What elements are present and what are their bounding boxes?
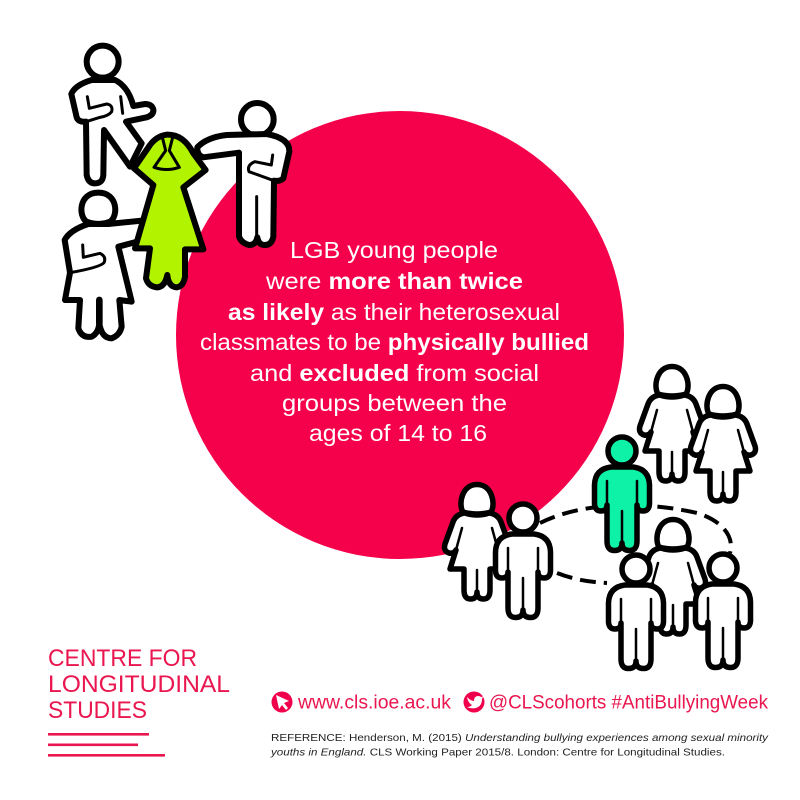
figure: woman top (640, 366, 704, 481)
figure: pointing man (197, 103, 289, 245)
figure: woman top right (690, 386, 756, 501)
group: bullying figures (65, 46, 289, 338)
website link: www.cls.ioe.ac.uk (297, 692, 451, 714)
figure: excluded green man (594, 437, 650, 550)
main statement (200, 237, 589, 446)
figure: victim in green (134, 135, 206, 287)
main statement: were more than twice (265, 268, 523, 294)
figure: woman left (444, 484, 510, 599)
icon: twitter bird (464, 692, 484, 712)
reference (270, 732, 769, 758)
twitter handle and hashtag: @CLScohorts #AntiBullyingWeek (489, 692, 768, 714)
main statement: classmates to be physically bullied (200, 329, 589, 355)
icon: website cursor (272, 692, 292, 712)
reference: REFERENCE: Henderson, M. (2015) Understanding bullying experiences among sexual minority (271, 732, 769, 744)
red circle (176, 111, 624, 559)
figure: woman lower (640, 520, 706, 634)
figure: man lower right (696, 554, 750, 668)
main statement: and excluded from social (250, 360, 539, 386)
main statement: groups between the (282, 390, 507, 416)
group: excluded figures (444, 366, 756, 668)
figure: kicking man (71, 46, 153, 183)
logo: Centre for Longitudinal Studies: STUDIES (48, 697, 147, 724)
main statement: ages of 14 to 16 (309, 420, 487, 446)
logo: Centre for Longitudinal Studies: LONGITUDINAL (48, 671, 230, 698)
reference: youths in England. CLS Working Paper 2015/8. London: Centre for Longitudinal Studies. (270, 746, 725, 758)
figure: man lower left (608, 555, 664, 668)
figure: man left (496, 504, 550, 618)
main statement: as likely as their heterosexual (228, 299, 560, 325)
logo: Centre for Longitudinal Studies: CENTRE FOR (48, 645, 197, 672)
logo: Centre for Longitudinal Studies (48, 645, 230, 757)
main statement: LGB young people (290, 237, 498, 263)
dashed exclusion ring (540, 505, 731, 583)
figure: pushing woman (65, 193, 160, 338)
